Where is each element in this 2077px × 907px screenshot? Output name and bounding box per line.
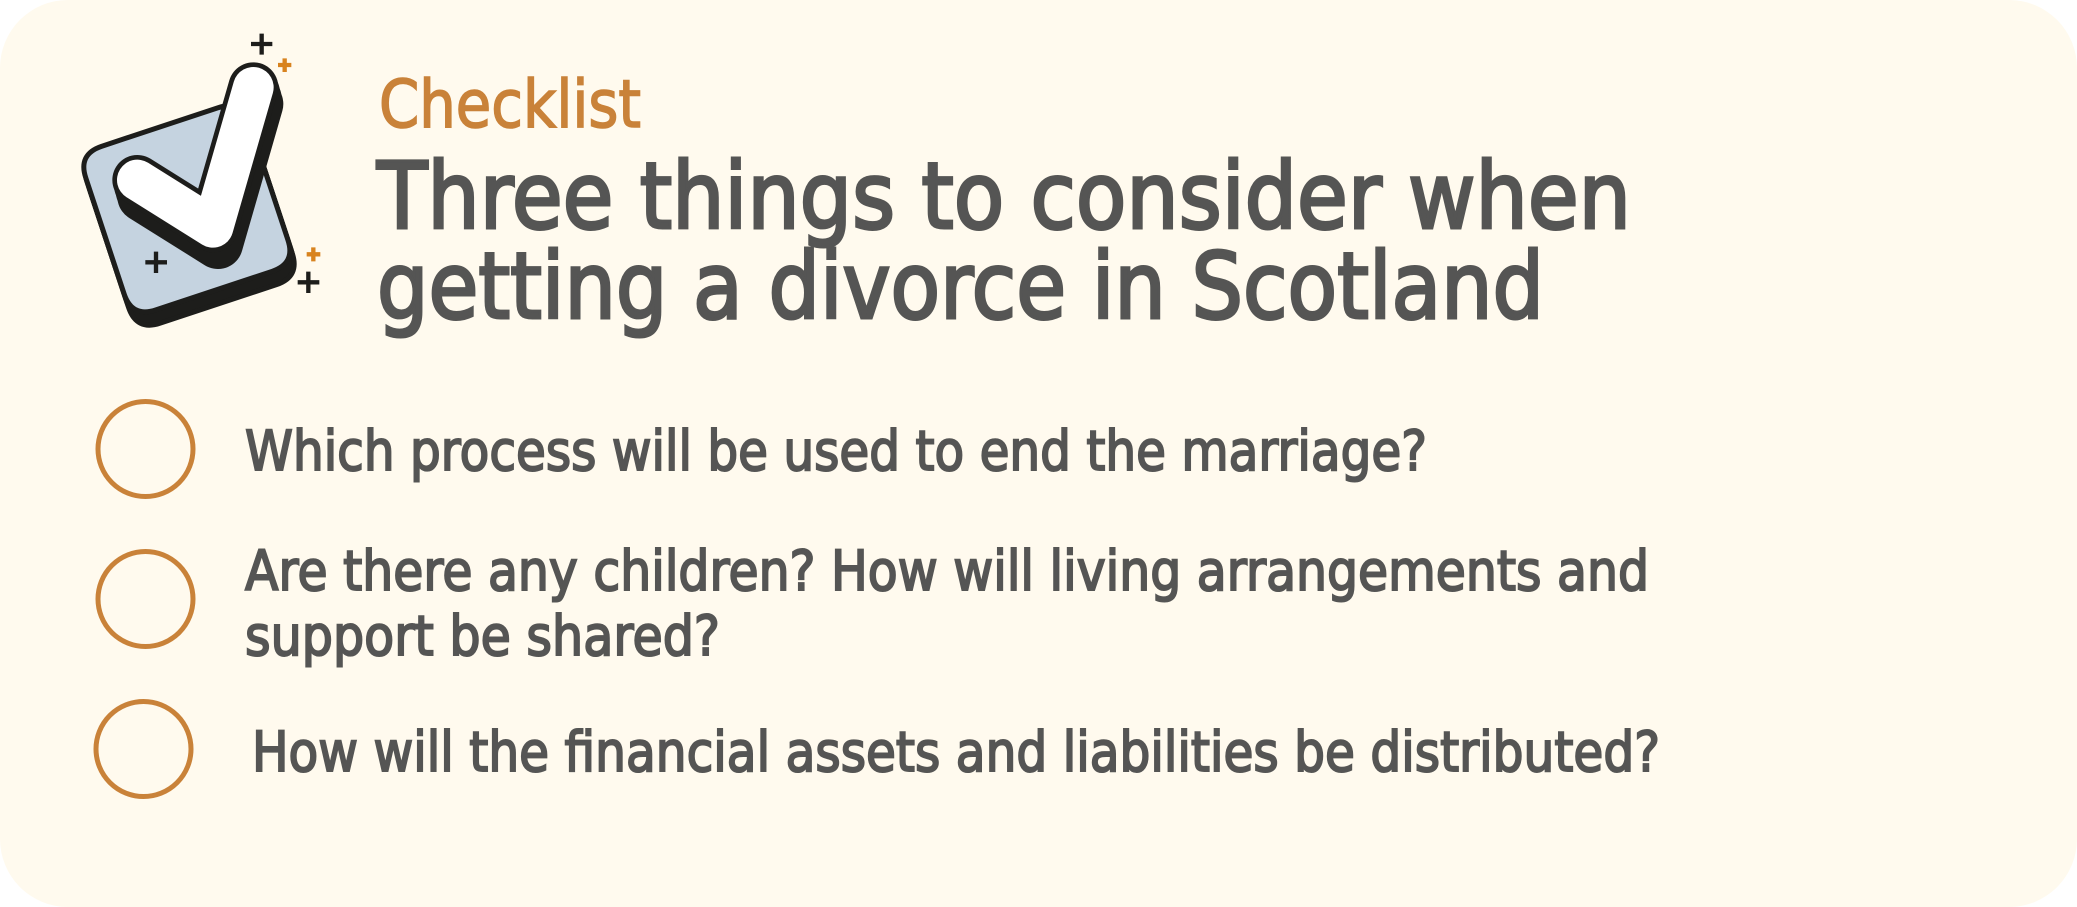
item text 2	[245, 539, 1649, 668]
checklist item 3	[96, 702, 1660, 796]
icon: checkbox face	[84, 106, 290, 312]
eyebrow: Checklist: Checklist	[379, 66, 641, 143]
checklist item 2	[98, 539, 1649, 668]
icon: tick outline	[137, 87, 253, 227]
icon: tilted checkbox with tick	[84, 34, 320, 325]
item text 2: Are there any children? How will living arrangements and	[245, 539, 1649, 603]
title: getting a divorce in Scotland	[377, 233, 1544, 340]
item text 2: support be shared?	[245, 604, 720, 668]
title: Three things to consider when	[376, 143, 1631, 250]
icon: checkbox shadow	[85, 110, 294, 325]
icon: tick shadow	[139, 93, 258, 244]
item text 1: Which process will be used to end the marriage?	[245, 419, 1427, 483]
icon: tick face	[137, 87, 253, 227]
checklist item 1	[98, 402, 1427, 496]
icon: empty checkbox circle 1	[98, 402, 193, 496]
icon: empty checkbox circle 2	[98, 552, 193, 646]
title	[376, 143, 1631, 340]
icon: sparkle plus signs	[145, 34, 320, 293]
item text 3: How will the financial assets and liabilities be distributed?	[252, 720, 1660, 784]
icon: empty checkbox circle 3	[96, 702, 191, 796]
